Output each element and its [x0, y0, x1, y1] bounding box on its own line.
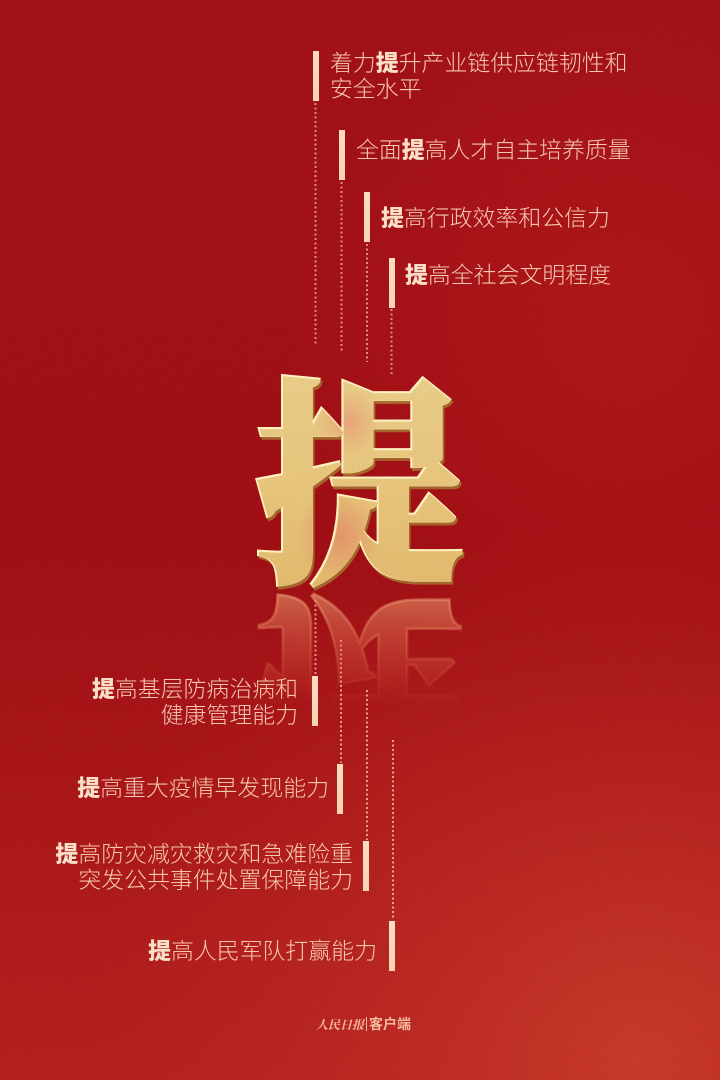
highlight edge: 提	[254, 312, 463, 628]
item 7: text: 突发公共事件处置保障能力	[78, 867, 353, 893]
item 1: bar	[313, 51, 319, 101]
pink sheen: upper box: 提	[255, 313, 464, 629]
item 8: bar	[389, 921, 395, 971]
item 5: text	[92, 676, 298, 728]
item 4: bar	[389, 258, 395, 308]
item 1: text	[330, 50, 628, 102]
item 3: bar	[364, 192, 370, 242]
item 1: text: 着力提升产业链供应链韧性和	[330, 50, 628, 76]
item 4: text: 提高全社会文明程度	[405, 262, 611, 288]
reflection: 提	[254, 552, 463, 868]
logo: 人民日报客户端	[316, 1016, 411, 1032]
gold glyph	[254, 312, 465, 630]
item 5: bar	[312, 676, 318, 726]
logo: 人民日报客户端: 人民日报	[316, 1018, 364, 1032]
extrusion shadow: 提	[256, 315, 465, 630]
item 5: text: 健康管理能力	[161, 702, 298, 728]
item 7: text: 提高防灾减灾救灾和急难险重	[55, 841, 353, 867]
item 2: bar	[339, 130, 345, 180]
item 7: text	[55, 841, 353, 893]
pink sheen: lower-left stroke: 提	[255, 313, 464, 629]
logo: 人民日报客户端: 客户端	[369, 1016, 411, 1032]
item 8: text: 提高人民军队打赢能力	[148, 938, 377, 964]
item 2: text: 全面提高人才自主培养质量	[356, 137, 631, 163]
item 6: text: 提高重大疫情早发现能力	[77, 775, 329, 801]
item 3: text: 提高行政效率和公信力	[381, 205, 610, 231]
gold face: 提	[255, 313, 464, 629]
item 5: text: 提高基层防病治病和	[92, 676, 298, 702]
item 6: bar	[337, 764, 343, 814]
item 1: text: 安全水平	[330, 76, 422, 102]
item 7: bar	[363, 841, 369, 891]
